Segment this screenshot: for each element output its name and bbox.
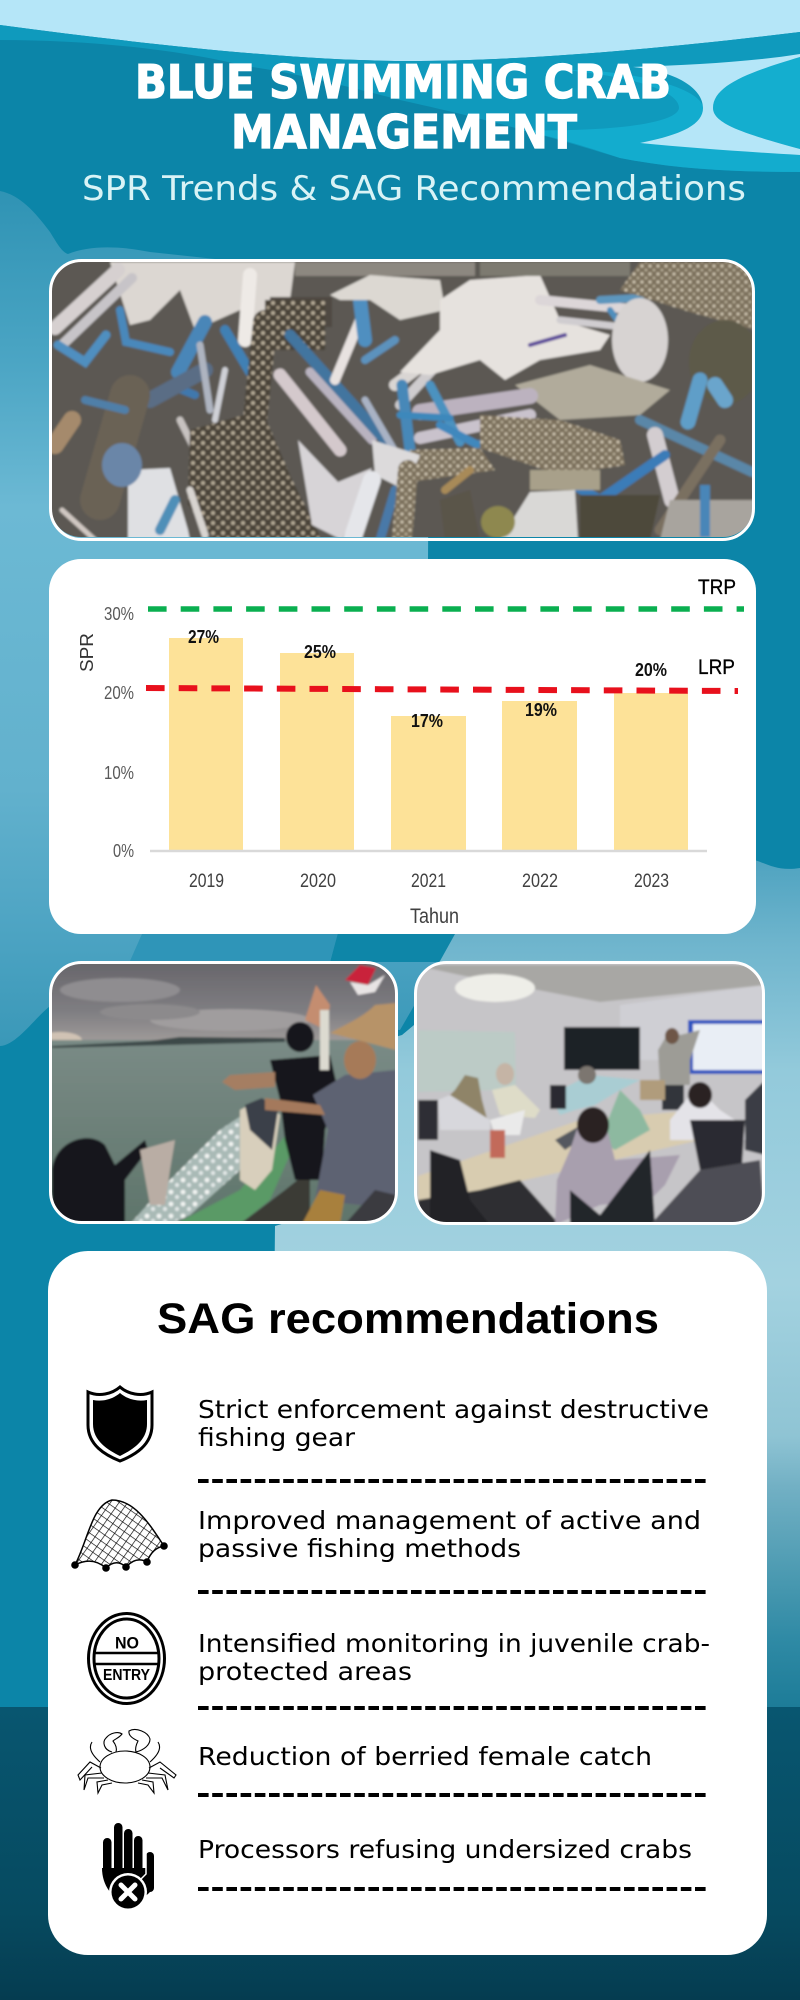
photo: pile of blue swimming crabs: [49, 259, 761, 541]
y axis labels: [104, 604, 134, 861]
x axis year labels: 2019: [189, 871, 224, 892]
background: left watercolour patch: [0, 191, 455, 1046]
icon: no entry sign: ENTRY: [103, 1667, 150, 1684]
background: sky: [0, 0, 800, 61]
y axis title: SPR: [77, 633, 97, 672]
icon: hand with cross: [102, 1823, 154, 1911]
recommendation text 2: Improved management of active and: [198, 1506, 701, 1535]
recommendation text 5: Processors refusing undersized crabs: [198, 1835, 692, 1864]
y axis labels: 0%: [113, 841, 134, 861]
recommendation text 4: Reduction of berried female catch: [198, 1742, 652, 1771]
background: chart gap dark patch: [330, 933, 456, 962]
icon: shield: [88, 1387, 152, 1461]
x axis year labels: 2021: [411, 871, 446, 892]
bar value labels: 27%: [188, 627, 219, 647]
x axis year labels: 2020: [300, 871, 336, 892]
x axis year labels: 2023: [634, 871, 669, 892]
title: [135, 55, 671, 159]
recommendation text 3: protected areas: [198, 1657, 412, 1686]
y axis labels: 20%: [104, 683, 134, 703]
reference line: TRP green dashed: [148, 606, 744, 612]
recommendation text 3: [198, 1629, 710, 1686]
background: right watercolour patch: [270, 858, 800, 1707]
bars: yearly SPR: [169, 638, 688, 850]
panel: SAG recommendations: [48, 1251, 767, 1955]
background: middle darker patch: [130, 934, 338, 961]
bar value labels: 17%: [411, 711, 443, 731]
background: deep sea band: [0, 1707, 800, 2000]
wave: bright band: [520, 70, 800, 172]
recommendation text 1: Strict enforcement against destructive: [198, 1395, 709, 1424]
title: MANAGEMENT: [231, 105, 578, 159]
recommendation text 2: passive fishing methods: [198, 1534, 521, 1563]
recommendation text 2: [198, 1506, 701, 1563]
x axis year labels: 2022: [522, 871, 558, 892]
chart axis line: [150, 850, 707, 852]
bar value labels: 19%: [525, 700, 557, 720]
icon: crab outline: [78, 1730, 176, 1793]
recommendation text 1: [198, 1395, 709, 1452]
recommendation text 3: Intensified monitoring in juvenile crab-: [198, 1629, 710, 1658]
reference line: LRP red dashed: [146, 688, 738, 691]
bar value labels: [188, 627, 667, 731]
title: BLUE SWIMMING CRAB: [135, 55, 671, 109]
label: LRP: LRP: [698, 656, 735, 679]
icon: no entry sign: NO: [115, 1634, 139, 1652]
wave: pale hourglass: [633, 54, 800, 155]
panel heading: SAG recommendations: [157, 1295, 659, 1343]
y axis labels: 30%: [104, 604, 134, 624]
photo: SAG meeting in a conference room: [414, 961, 766, 1227]
x axis title: Tahun: [410, 905, 459, 928]
recommendation text 1: fishing gear: [198, 1423, 356, 1452]
subtitle: SPR Trends & SAG Recommendations: [82, 169, 746, 209]
label: TRP: TRP: [698, 576, 736, 599]
panel: SPR bar chart: [49, 559, 756, 934]
icon: fishing net: [71, 1500, 168, 1572]
bar value labels: 20%: [635, 660, 667, 680]
x axis year labels: [189, 871, 669, 892]
wave: right blob: [713, 57, 800, 149]
y axis labels: 10%: [104, 763, 134, 783]
photo: fishers hauling nets from a boat: [38, 961, 399, 1230]
wave: main band: [0, 25, 800, 172]
bar value labels: 25%: [304, 642, 336, 662]
icon: no entry sign: [88, 1614, 164, 1704]
